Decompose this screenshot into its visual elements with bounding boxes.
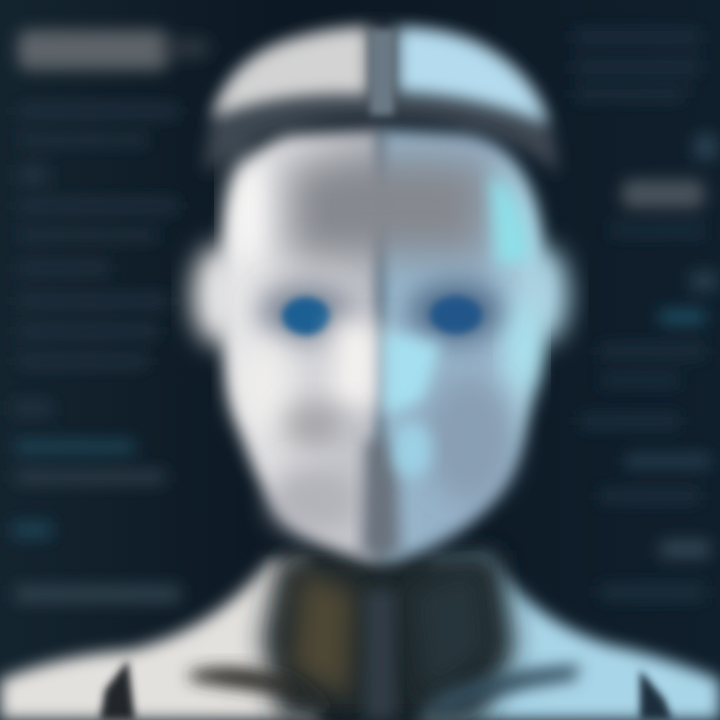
strap right bbox=[640, 670, 672, 720]
mouth shading bbox=[285, 401, 345, 449]
text block: lower lines bbox=[580, 135, 718, 599]
helmet centre strip bbox=[370, 30, 394, 115]
left eye iris bbox=[282, 297, 330, 335]
neck centre column bbox=[365, 590, 395, 720]
nose bright left bbox=[330, 320, 380, 410]
text block: upper lines bbox=[12, 105, 178, 416]
neck core bbox=[262, 550, 515, 720]
forehead teal glow bbox=[490, 175, 530, 265]
right eye socket bbox=[410, 282, 502, 342]
collar right bbox=[430, 665, 580, 715]
heading bbox=[18, 30, 168, 70]
neck bronze panel bbox=[290, 570, 355, 700]
robot: helmet bbox=[205, 25, 558, 175]
robot: shoulders and neck bbox=[0, 550, 720, 720]
face right half bbox=[380, 130, 545, 562]
helmet dark rim bbox=[205, 25, 558, 175]
panel: left data column bbox=[12, 30, 210, 603]
panel: right data column bbox=[575, 30, 718, 599]
right lower face bbox=[425, 380, 515, 500]
heading bbox=[622, 180, 704, 208]
neck dark right panel bbox=[410, 565, 490, 700]
left cheek white bbox=[234, 340, 290, 430]
helmet left shell bbox=[212, 28, 368, 118]
shoulder left bbox=[0, 560, 320, 720]
left eye socket bbox=[259, 282, 351, 342]
robot: face bbox=[192, 130, 569, 562]
mouth blue patch bbox=[392, 422, 432, 478]
collar left bbox=[190, 668, 340, 715]
nose blue right bbox=[385, 330, 440, 415]
forehead plate bbox=[290, 156, 490, 262]
face left half bbox=[221, 130, 380, 562]
cheek teal glow bbox=[506, 300, 538, 390]
right eye iris bbox=[430, 296, 482, 334]
text block: teal lines bbox=[12, 440, 180, 603]
face side bulges bbox=[192, 245, 244, 345]
chin centre dark bbox=[362, 440, 400, 555]
shoulder right bbox=[420, 555, 720, 720]
cheek highlight left bbox=[230, 155, 270, 265]
lower left face bbox=[270, 465, 360, 535]
text block: top lines bbox=[575, 30, 700, 100]
helmet right shell bbox=[398, 28, 548, 125]
strap left bbox=[100, 660, 135, 720]
